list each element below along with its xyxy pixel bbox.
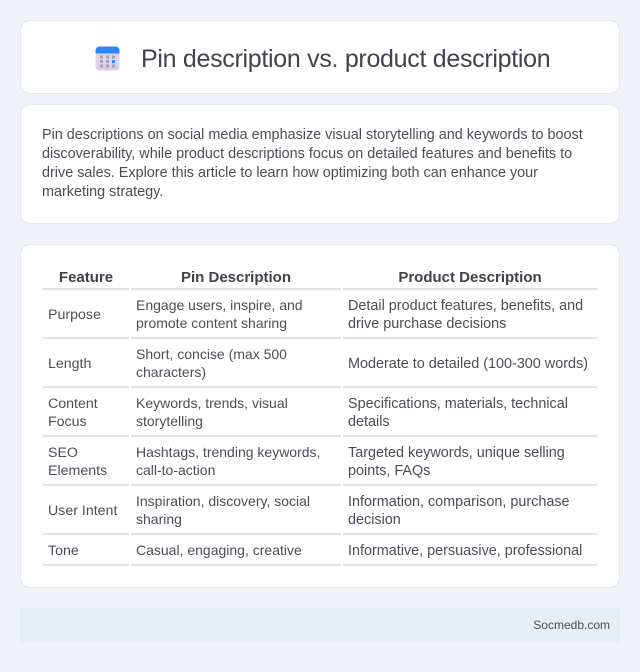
header: feature: Feature [59,269,113,286]
comparison table: points, FAQs [348,463,430,479]
comparison table [43,269,597,566]
comparison table: Detail product features, benefits, and [348,298,583,314]
footer bar [20,608,620,642]
comparison table: Informative, persuasive, professional [348,543,582,559]
comparison table: Engage users, inspire, and [136,297,303,313]
intro text: Pin descriptions on social media emphasize visual storytelling and keywords to boost [42,127,583,143]
comparison table: Casual, engaging, creative [136,542,302,558]
comparison table: Moderate to detailed (100-300 words) [348,356,588,372]
row: user intent: User Intent [48,503,117,519]
intro text [42,127,583,200]
comparison table: Short, concise (max 500 [136,346,287,362]
comparison table: sharing [136,511,182,527]
row: tone: Tone [48,543,79,559]
comparison table: storytelling [136,413,203,429]
row: content focus [48,396,98,430]
comparison table: Specifications, materials, technical [348,396,568,412]
title: Pin description vs. product description [141,45,550,73]
comparison table: call-to-action [136,462,215,478]
icon: calendar [96,46,120,70]
comparison table: Targeted keywords, unique selling [348,445,565,461]
comparison table: decision [348,512,401,528]
row: seo elements [48,445,107,479]
comparison table: promote content sharing [136,315,287,331]
intro text: discoverability, while product descriptions focus on detailed features and benefits to [42,146,572,162]
title card [20,20,620,94]
table card [20,244,620,588]
intro card [20,104,620,224]
comparison table: Hashtags, trending keywords, [136,444,320,460]
intro text: marketing strategy. [42,184,163,200]
comparison table: characters) [136,364,206,380]
comparison table: Inspiration, discovery, social [136,493,310,509]
header: product description: Product Description [398,269,542,286]
footer text: Socmedb.com [533,618,610,632]
comparison table: Information, comparison, purchase [348,494,570,510]
row: seo elements: SEO [48,445,78,461]
comparison table: Keywords, trends, visual [136,395,288,411]
row: length: Length [48,356,91,372]
intro text: drive sales. Explore this article to learn how optimizing both can enhance your [42,165,538,181]
row: seo elements: Elements [48,463,107,479]
comparison table: details [348,414,390,430]
row: content focus: Content [48,396,98,412]
header: pin description: Pin Description [181,269,291,286]
comparison table: drive purchase decisions [348,316,506,332]
row: purpose: Purpose [48,307,101,323]
row: content focus: Focus [48,414,87,430]
